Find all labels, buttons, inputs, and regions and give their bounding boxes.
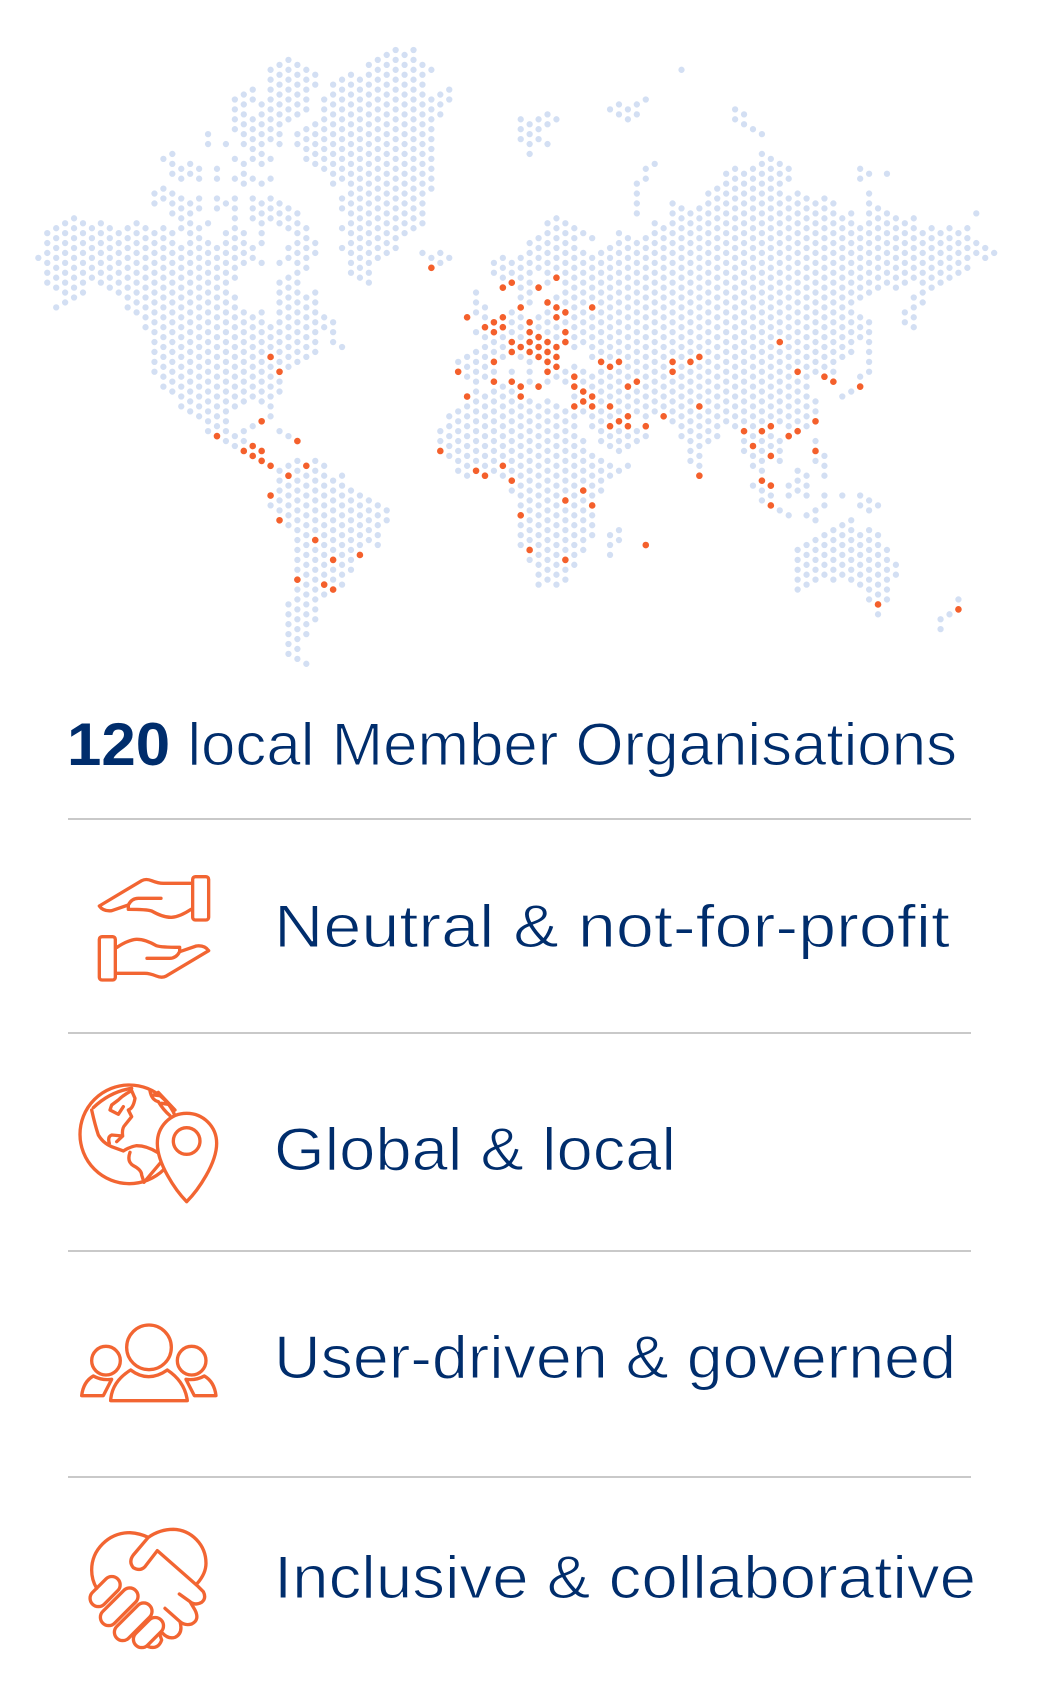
text: user-driven: User-driven & governed [274, 1324, 956, 1391]
icon: globe and pin [80, 1085, 217, 1202]
row: user-driven [82, 1324, 956, 1401]
icon: handshake heart [87, 1529, 206, 1651]
row: neutral [99, 877, 950, 980]
member organisation dots [217, 268, 958, 609]
text: neutral: Neutral & not-for-profit [274, 893, 950, 960]
row: inclusive [87, 1529, 976, 1651]
map land dots [38, 50, 994, 664]
dotted world map [38, 50, 994, 664]
divider 3 [68, 1250, 971, 1252]
text: inclusive: Inclusive & collaborative [274, 1544, 976, 1611]
divider 4 [68, 1476, 971, 1478]
headline: 120 local Member Organisations [67, 711, 957, 778]
text: global: Global & local [274, 1116, 676, 1183]
divider 1 [68, 818, 971, 820]
icon: people [82, 1325, 216, 1401]
divider 2 [68, 1032, 971, 1034]
row: global [80, 1085, 676, 1202]
icon: hands [99, 877, 209, 980]
